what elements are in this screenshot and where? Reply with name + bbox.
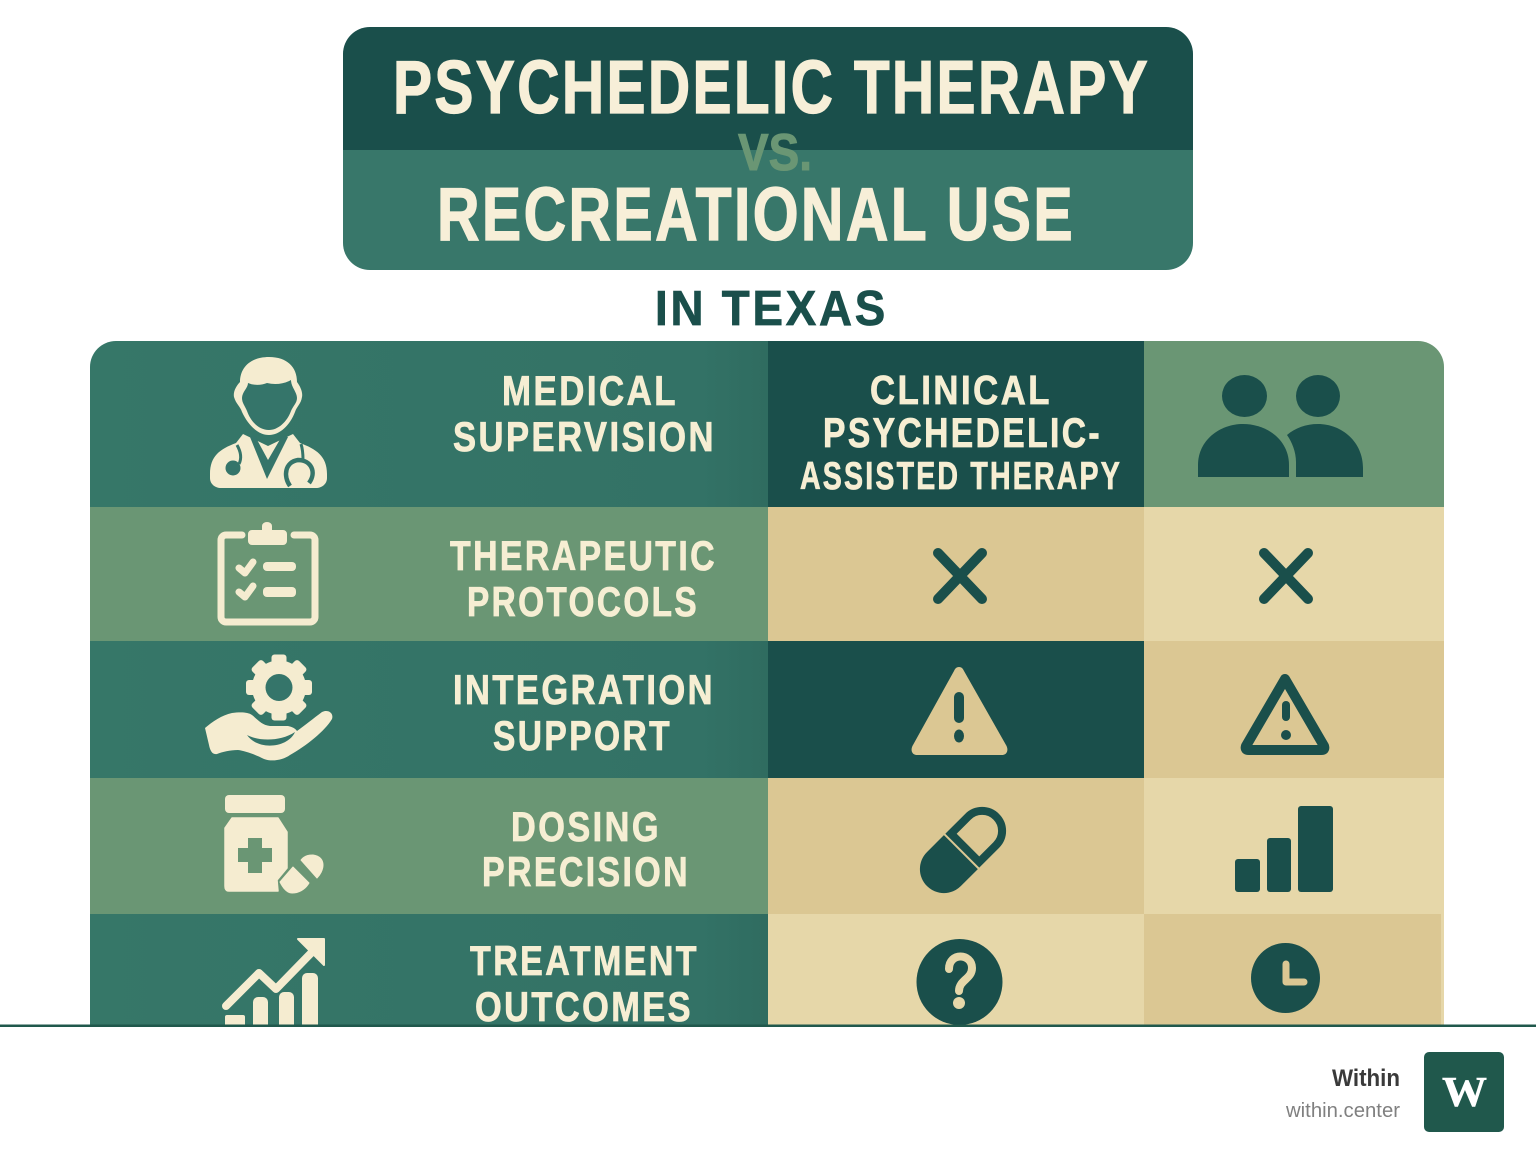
label: medical supervision: SUPERVISION (453, 413, 716, 460)
title banner (343, 27, 1193, 270)
label: dosing precision: PRECISION (482, 848, 690, 895)
label: therapeutic protocols: THERAPEUTIC (450, 532, 717, 579)
icon: x mark clinical (938, 553, 982, 599)
brand name: Within (1332, 1065, 1400, 1092)
icon: question mark circle (916, 939, 1002, 1025)
label: treatment outcomes: TREATMENT (470, 937, 699, 984)
column heading: clinical psychedelic-assisted therapy: CLINICAL (870, 367, 1052, 413)
icon: outlined warning triangle (1246, 679, 1324, 750)
icon: filled warning triangle (912, 667, 1007, 755)
column heading: clinical psychedelic-assisted therapy: ASSISTED THERAPY (800, 455, 1122, 498)
row: therapeutic protocols (90, 507, 1444, 641)
label: treatment outcomes (470, 946, 696, 1022)
title line: psychedelic therapy: PSYCHEDELIC THERAPY (393, 45, 1150, 129)
row: medical supervision (90, 341, 1444, 507)
label: dosing precision: DOSING (511, 803, 661, 850)
label: therapeutic protocols: PROTOCOLS (467, 578, 699, 625)
label: integration support: INTEGRATION (453, 666, 715, 713)
icon: clipboard checklist (221, 522, 315, 622)
label: dosing precision (484, 812, 686, 887)
label: integration support: SUPPORT (493, 712, 672, 759)
column heading: clinical psychedelic-assisted therapy (800, 375, 1120, 490)
label: therapeutic protocols (450, 540, 714, 617)
label: treatment outcomes: OUTCOMES (475, 983, 693, 1030)
label: medical supervision: MEDICAL (502, 367, 678, 414)
icon: doctor (210, 357, 327, 488)
icon: rising bars (1235, 806, 1333, 892)
icon: two people (1198, 375, 1363, 477)
logo (1424, 1052, 1504, 1132)
row: integration support (90, 641, 1444, 778)
row: treatment outcomes (90, 914, 1444, 1024)
title line: recreational use: RECREATIONAL USE (437, 172, 1075, 256)
column heading: clinical psychedelic-assisted therapy: PSYCHEDELIC- (823, 409, 1102, 456)
icon: clock (1251, 943, 1320, 1013)
footer bar (0, 1024, 1536, 1154)
comparison table (90, 341, 1444, 1037)
icon: growth chart arrow (225, 939, 324, 1037)
label: integration support (454, 674, 711, 751)
title versus label: VS. (738, 124, 812, 182)
brand url: within.center (1285, 1100, 1400, 1122)
icon: x mark recreational (1264, 553, 1308, 599)
label: medical supervision (454, 376, 712, 452)
row: dosing precision (90, 778, 1444, 914)
icon: hand holding gear (205, 654, 332, 760)
icon: capsule (920, 806, 1006, 894)
subtitle: in texas: IN TEXAS (655, 282, 888, 336)
icon: medicine bottle and pill (225, 795, 323, 893)
logo: W (1442, 1070, 1487, 1116)
